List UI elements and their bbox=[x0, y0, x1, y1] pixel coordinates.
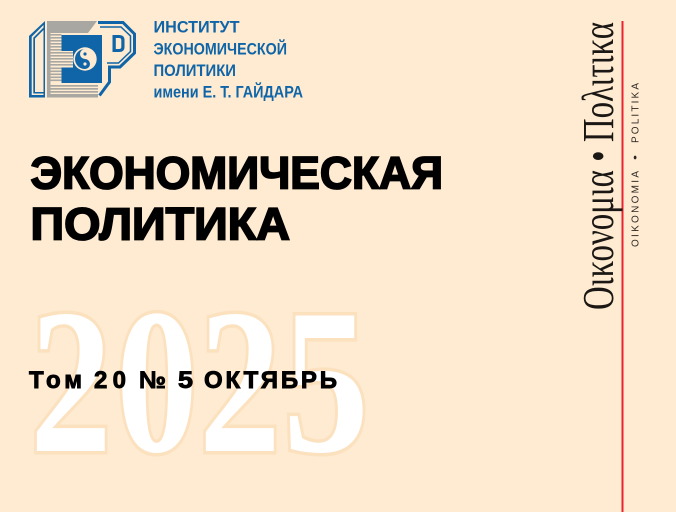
year 2025 watermark: 5 bbox=[283, 267, 369, 497]
logo yin-yang bbox=[73, 47, 97, 71]
year 2025 watermark: 2 bbox=[30, 268, 112, 496]
institute name: ПОЛИТИКИ bbox=[154, 61, 236, 80]
year 2025 watermark: 2 bbox=[199, 268, 281, 496]
issue line: Том bbox=[29, 367, 82, 394]
latin subtitle vertical: POLITIKA bbox=[630, 83, 642, 143]
logo striped E bbox=[47, 21, 98, 98]
issue line: 20 bbox=[94, 367, 126, 394]
year 2025 watermark: 0 bbox=[116, 268, 198, 496]
logo: Institute of Economic Policy bbox=[29, 21, 134, 98]
logo letter P outline bbox=[98, 22, 134, 96]
issue line: ОКТЯБРЬ bbox=[204, 367, 337, 394]
institute name: имени Е. Т. ГАЙДАРА bbox=[154, 82, 303, 102]
logo left bracket bbox=[29, 21, 45, 98]
journal title: ПОЛИТИКА bbox=[30, 198, 290, 250]
journal title bbox=[30, 148, 443, 250]
year 2025 watermark bbox=[30, 267, 369, 497]
latin subtitle vertical: • bbox=[630, 154, 642, 160]
issue line: № bbox=[139, 367, 166, 394]
issue line bbox=[29, 367, 337, 394]
issue line: 5 bbox=[178, 367, 193, 394]
latin subtitle vertical bbox=[630, 83, 642, 247]
logo blue block bbox=[62, 35, 102, 83]
red vertical rule bbox=[622, 21, 624, 512]
journal title: ЭКОНОМИЧЕСКАЯ bbox=[30, 148, 443, 198]
logo letter D bbox=[112, 35, 124, 52]
latin subtitle vertical: OIKONOMIA bbox=[630, 171, 642, 247]
institute name bbox=[154, 18, 303, 102]
institute name: ЭКОНОМИЧЕСКОЙ bbox=[154, 40, 287, 58]
institute name: ИНСТИТУТ bbox=[154, 18, 240, 36]
